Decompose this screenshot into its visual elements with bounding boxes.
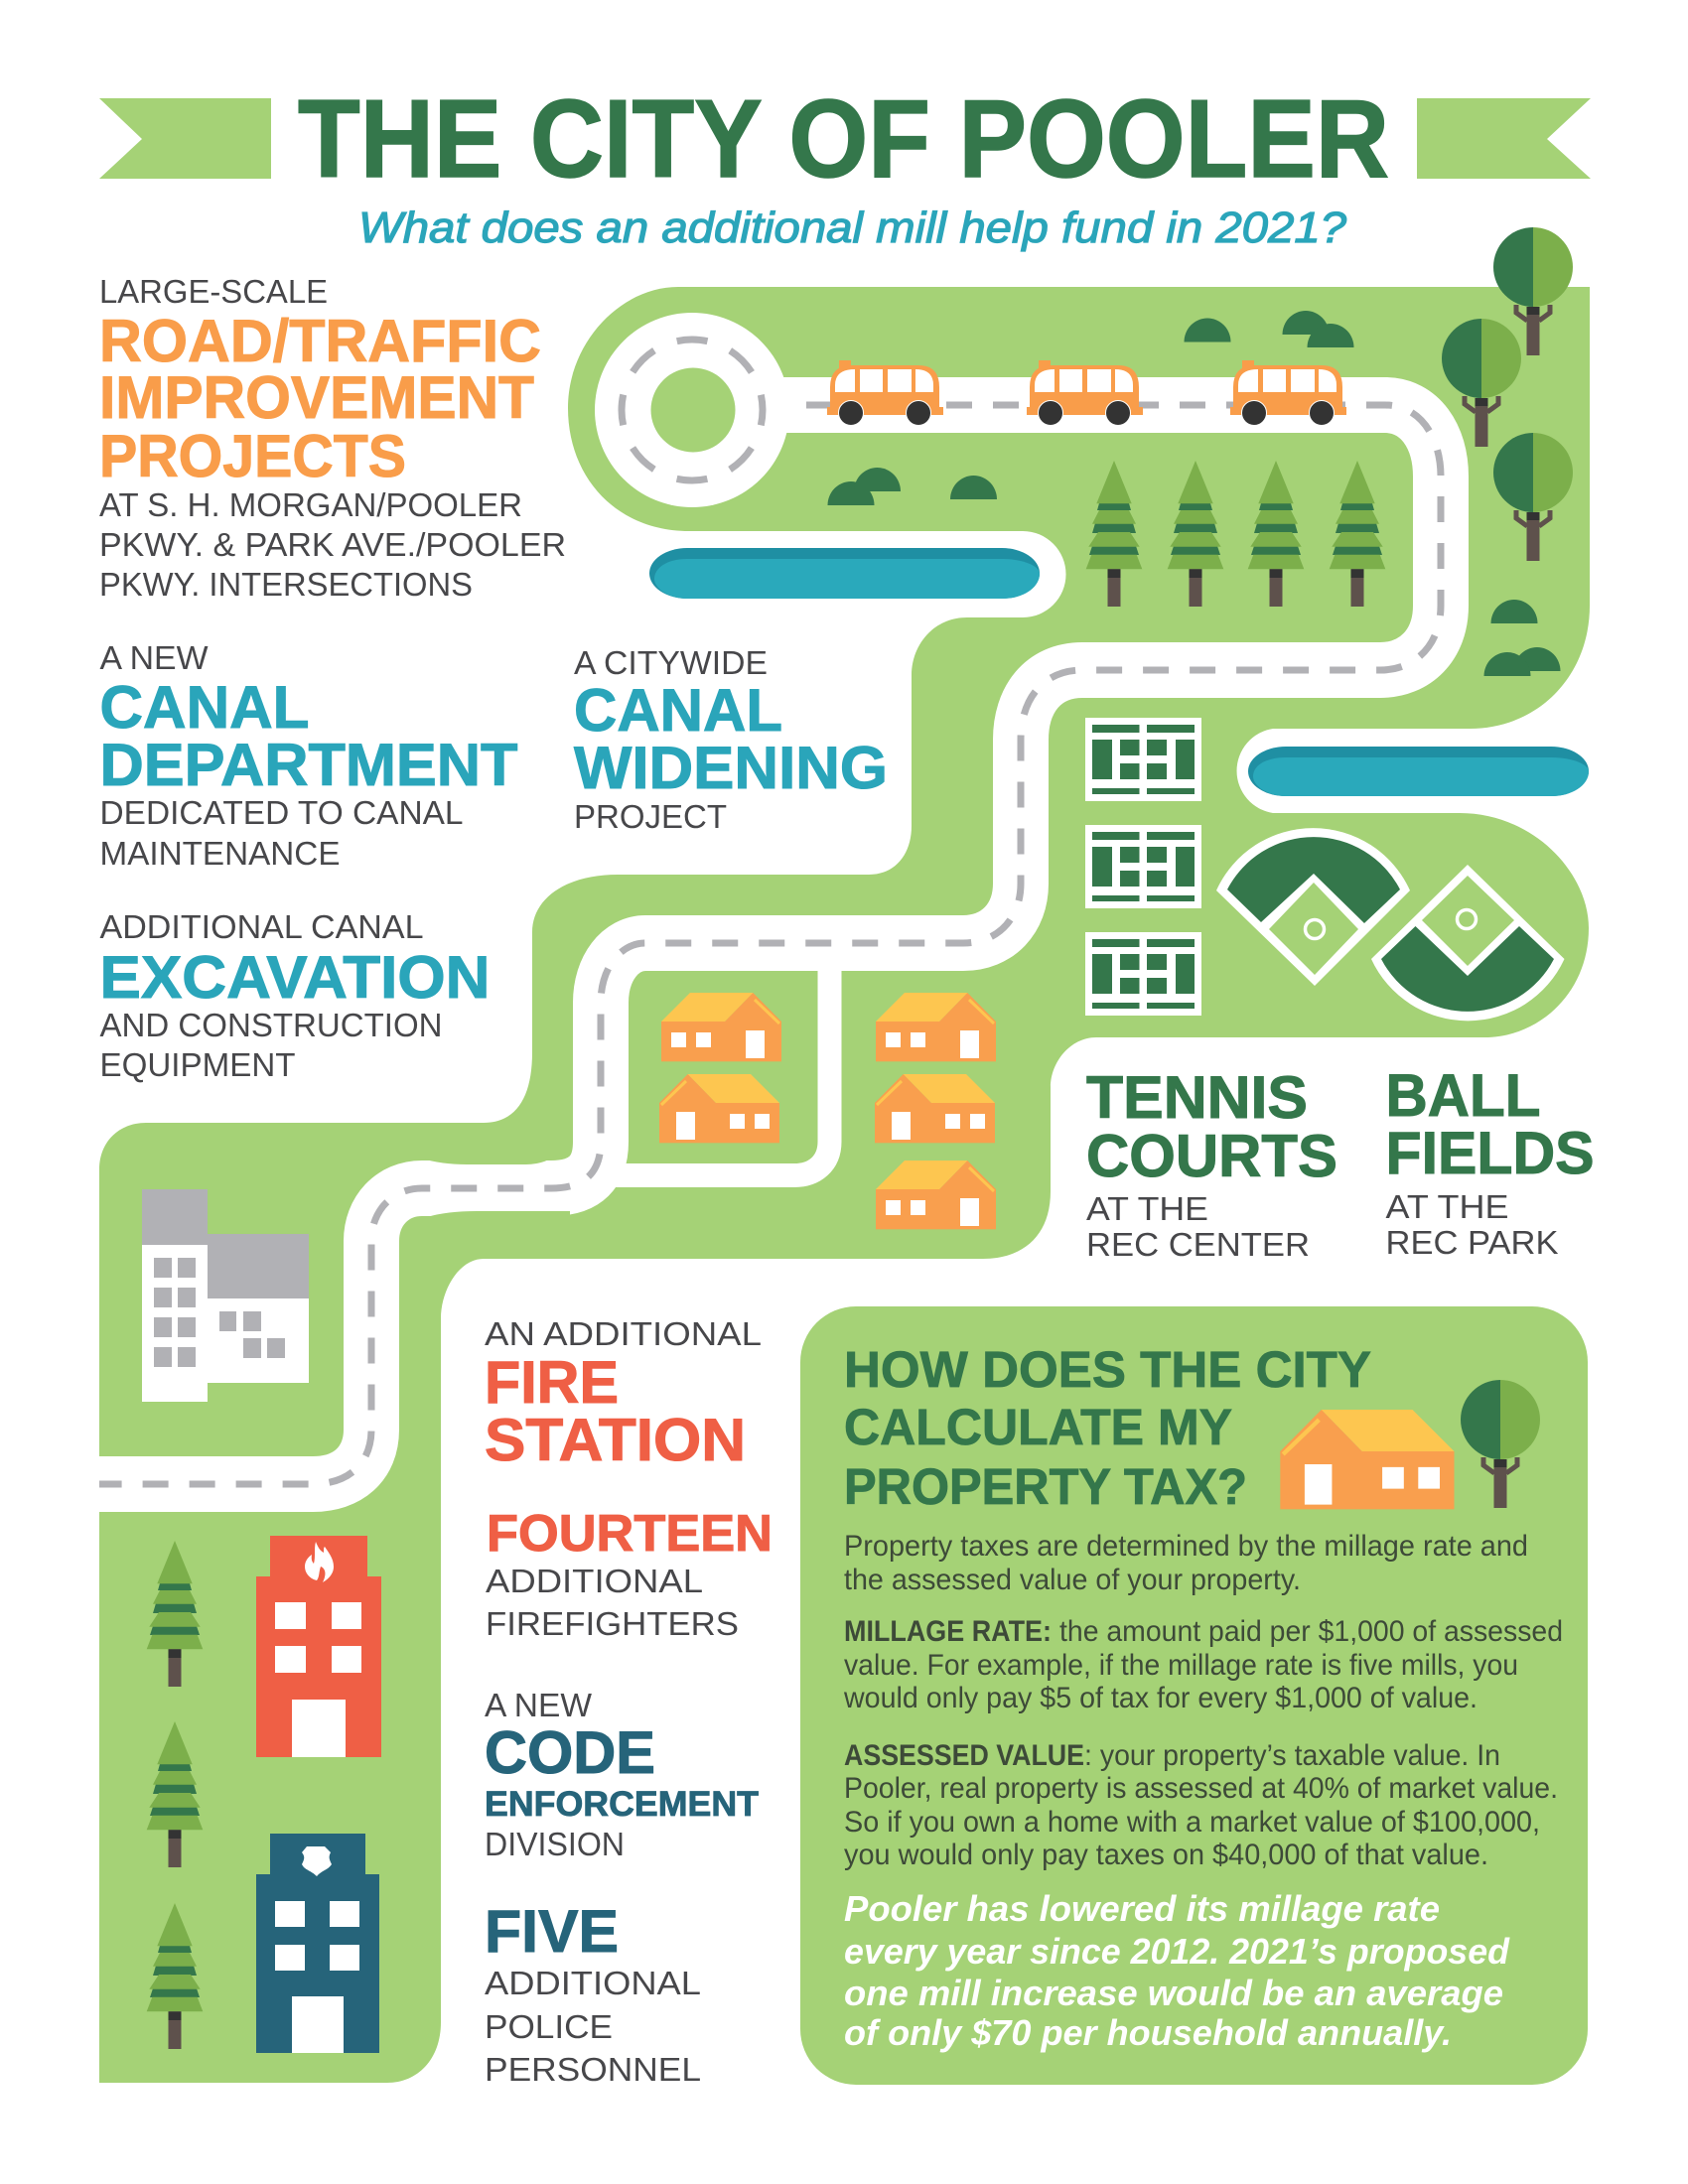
title ribbon: right xyxy=(1417,98,1591,179)
gray office building xyxy=(142,1189,309,1402)
text block: road/traffic improvement: PKWY. & PARK AVE./POOLER xyxy=(99,526,566,563)
heading: five: FIVE xyxy=(485,1898,619,1965)
text: assessed value xyxy=(844,1739,1558,1871)
text block: police personnel: PERSONNEL xyxy=(485,2051,701,2088)
pond: upper xyxy=(649,548,1040,599)
text: millage rate: would only pay $5 of tax for every $1,000 of value. xyxy=(843,1682,1477,1714)
heading: canal department: DEPARTMENT xyxy=(99,732,518,798)
text: intro: Property taxes are determined by the millage rate and xyxy=(844,1530,1528,1563)
heading: fire station xyxy=(485,1349,746,1473)
text block: canal widening: PROJECT xyxy=(574,798,727,835)
heading: how does the city calculate xyxy=(844,1341,1371,1515)
text: millage rate: the amount paid per $1,000 of assessed xyxy=(1059,1615,1563,1648)
text block: fire station xyxy=(485,1315,762,1473)
bus 1 xyxy=(827,360,943,425)
panel: property tax xyxy=(800,1306,1588,2085)
text block: ball fields: AT THE xyxy=(1386,1188,1509,1225)
text block: road/traffic improvement: LARGE-SCALE xyxy=(99,273,328,310)
heading: tennis courts xyxy=(1086,1064,1337,1189)
heading: tennis courts: COURTS xyxy=(1086,1123,1337,1189)
text block: excavation: AND CONSTRUCTION xyxy=(99,1007,443,1043)
heading: fire station: STATION xyxy=(485,1407,746,1473)
heading: ball fields: FIELDS xyxy=(1386,1120,1595,1186)
heading: tennis courts: TENNIS xyxy=(1086,1064,1308,1131)
text block: canal department: MAINTENANCE xyxy=(99,835,340,872)
roundabout xyxy=(595,313,789,507)
callout: millage rate history: one mill increase would be an average xyxy=(844,1973,1503,2013)
icon: tree xyxy=(1461,1380,1540,1508)
heading: how does the city calculate: CALCULATE MY xyxy=(844,1399,1232,1455)
text block: canal department: DEDICATED TO CANAL xyxy=(99,794,463,831)
text: millage rate: value. For example, if the millage rate is five mills, you xyxy=(844,1649,1518,1682)
text block: tennis courts: REC CENTER xyxy=(1086,1226,1310,1263)
text block: firefighters: FIREFIGHTERS xyxy=(486,1605,739,1642)
heading: road/traffic improvement projects: IMPROVEMENT xyxy=(99,364,534,431)
text block: code enforcement: DIVISION xyxy=(485,1826,625,1862)
text block: police personnel: ADDITIONAL xyxy=(485,1965,701,2001)
bushes xyxy=(828,311,1561,676)
text block: fire station: AN ADDITIONAL xyxy=(485,1315,762,1352)
text: millage rate: MILLAGE RATE: xyxy=(844,1615,1052,1648)
text: millage rate xyxy=(843,1615,1563,1714)
title ribbon: left xyxy=(99,98,271,179)
text block: ball fields: REC PARK xyxy=(1386,1224,1559,1261)
heading: road/traffic improvement projects xyxy=(99,308,541,489)
heading: canal widening: WIDENING xyxy=(574,735,888,801)
icon: house xyxy=(1280,1410,1454,1509)
heading: ball fields xyxy=(1386,1062,1595,1186)
heading: ball fields: BALL xyxy=(1386,1062,1541,1129)
text block: tennis courts xyxy=(1086,1064,1337,1263)
subtitle: What does an additional mill help fund in 2021? xyxy=(358,204,1347,252)
text: intro xyxy=(844,1530,1528,1596)
bus 3 xyxy=(1230,360,1346,425)
heading: canal widening: CANAL xyxy=(574,677,782,744)
heading: fourteen: FOURTEEN xyxy=(487,1505,773,1563)
text block: police personnel: POLICE xyxy=(485,2008,613,2045)
tennis court 2 xyxy=(1085,825,1201,908)
callout: millage rate history: of only $70 per household annually. xyxy=(844,2012,1452,2053)
text block: excavation xyxy=(99,908,491,1083)
heading: canal widening xyxy=(574,677,888,801)
text block: excavation: ADDITIONAL CANAL xyxy=(99,908,423,945)
title: THE CITY OF POOLER xyxy=(298,77,1389,201)
ball field 1 xyxy=(1216,828,1410,986)
heading: how does the city calculate: PROPERTY TAX? xyxy=(844,1458,1247,1515)
callout: millage rate history xyxy=(844,1888,1510,2053)
pond: right xyxy=(1248,747,1589,796)
text block: code enforcement: A NEW xyxy=(485,1687,593,1723)
round trees xyxy=(1442,227,1573,561)
bus 2 xyxy=(1027,360,1143,425)
text: assessed value: you would only pay taxes on $40,000 of that value. xyxy=(844,1839,1488,1871)
text block: canal department xyxy=(99,639,518,872)
text block: police personnel xyxy=(485,1898,701,2088)
text block: road/traffic improvement: PKWY. INTERSECTIONS xyxy=(99,566,473,603)
text block: canal widening xyxy=(574,644,888,835)
pine trees: lower left xyxy=(147,1541,203,2049)
text block: code enforcement xyxy=(485,1687,759,1862)
text block: firefighters xyxy=(486,1505,773,1642)
heading: road/traffic improvement projects: ROAD/TRAFFIC xyxy=(99,308,541,374)
text: assessed value: : your property’s taxable value. In xyxy=(1084,1739,1500,1772)
heading: fire station: FIRE xyxy=(485,1349,619,1416)
police station xyxy=(256,1834,379,2053)
icon: police badge xyxy=(302,1846,332,1876)
text block: firefighters: ADDITIONAL xyxy=(486,1563,703,1599)
pine trees: row xyxy=(1086,461,1385,607)
callout: millage rate history: Pooler has lowered its millage rate xyxy=(844,1888,1440,1929)
text block: road/traffic improvement xyxy=(99,273,566,603)
text: assessed value: Pooler, real property is assessed at 40% of market value. xyxy=(844,1772,1558,1805)
heading: code enforcement: ENFORCEMENT xyxy=(485,1785,759,1824)
heading: road/traffic improvement projects: PROJECTS xyxy=(99,423,406,489)
tennis court 3 xyxy=(1085,932,1201,1016)
text block: canal department: A NEW xyxy=(99,639,209,676)
road network xyxy=(99,405,1441,1484)
text block: ball fields xyxy=(1386,1062,1595,1261)
heading: canal department: CANAL xyxy=(99,674,310,741)
heading: code enforcement xyxy=(485,1719,759,1824)
fire station xyxy=(256,1536,381,1757)
text block: canal widening: A CITYWIDE xyxy=(574,644,768,681)
heading: code enforcement: CODE xyxy=(485,1719,655,1786)
callout: millage rate history: every year since 2012. 2021’s proposed xyxy=(844,1931,1510,1972)
tennis court 1 xyxy=(1085,718,1201,801)
heading: canal department xyxy=(99,674,518,798)
text block: excavation: EQUIPMENT xyxy=(99,1046,296,1083)
text: assessed value: So if you own a home with a market value of $100,000, xyxy=(844,1806,1540,1839)
icon: flame xyxy=(305,1542,334,1582)
heading: how does the city calculate: HOW DOES THE CITY xyxy=(844,1341,1371,1398)
text: intro: the assessed value of your property. xyxy=(844,1564,1301,1596)
heading: excavation: EXCAVATION xyxy=(99,944,491,1011)
houses xyxy=(659,993,996,1229)
ball field 2 xyxy=(1371,865,1565,1021)
text block: road/traffic improvement: AT S. H. MORGAN/POOLER xyxy=(99,486,522,523)
text block: tennis courts: AT THE xyxy=(1086,1190,1208,1227)
map: green land xyxy=(99,287,1590,2083)
text: assessed value: ASSESSED VALUE xyxy=(844,1739,1084,1772)
